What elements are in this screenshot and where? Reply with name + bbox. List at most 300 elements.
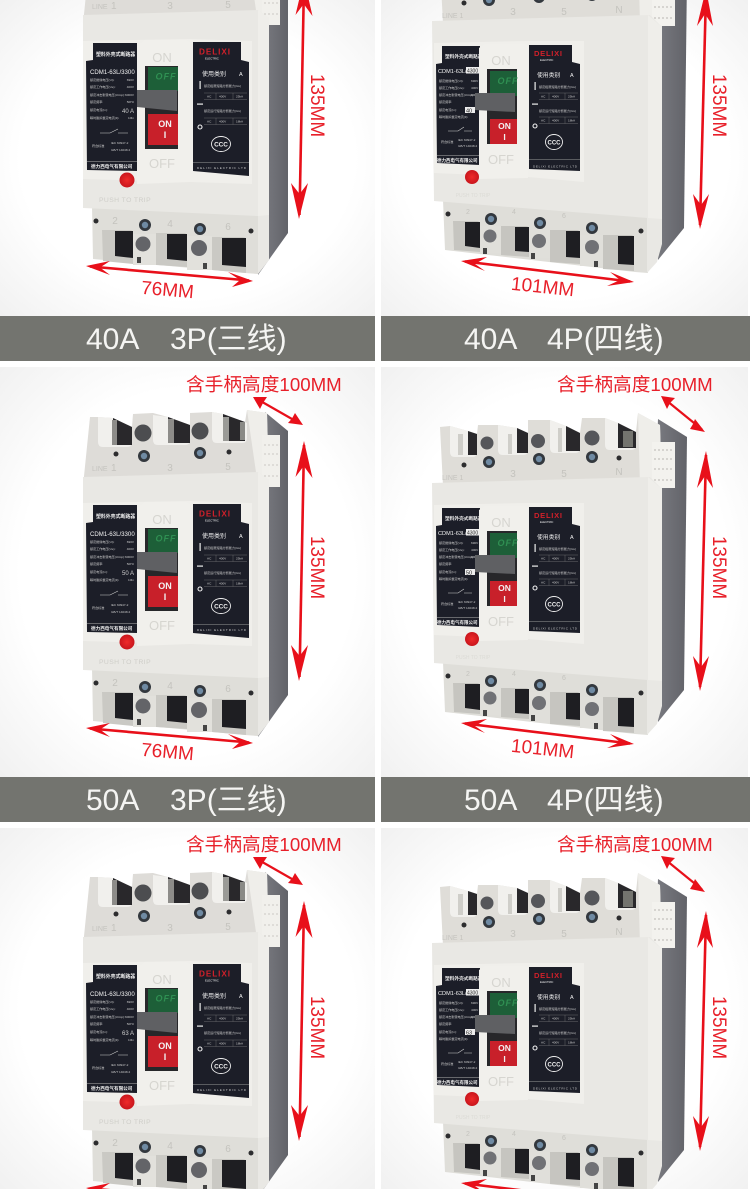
switch text: 2 — [466, 209, 470, 216]
label text: AC — [207, 582, 212, 586]
label text: 额定频率: — [90, 561, 103, 566]
label text: 瞬时脱扣整定电流(Ii): — [439, 114, 468, 119]
switch text: 5 — [225, 922, 231, 933]
switch text: 3 — [510, 929, 516, 940]
label text: 额定电流(In): — [439, 569, 457, 574]
label text: 25kA — [236, 556, 244, 560]
label text: 400V — [552, 556, 560, 560]
label text: IEC 60947-2 — [458, 1060, 476, 1064]
switch text: PUSH TO TRIP — [99, 197, 151, 204]
label text: 额定极限短路分断能力(Icu) — [204, 83, 241, 88]
switch text: ON — [158, 1041, 172, 1051]
switch text — [92, 922, 231, 1155]
switch text: LINE 1 — [442, 935, 464, 942]
switch text: OFF — [156, 72, 176, 82]
label text: 25kA — [568, 94, 576, 98]
label text: 50Hz — [127, 1022, 134, 1026]
switch — [465, 44, 528, 184]
label text: 6000V — [125, 1015, 135, 1019]
label text: 10In — [128, 116, 134, 120]
switch text: ON — [158, 119, 172, 129]
label text: AC — [541, 94, 546, 98]
label text: AC — [207, 1016, 212, 1020]
label text: 18kA — [236, 582, 244, 586]
height label: 135MM — [708, 74, 729, 137]
switch text: ON — [152, 512, 172, 527]
switch text: I — [503, 132, 506, 142]
handle height label: 含手柄高度100MM — [557, 374, 713, 395]
switch text: LINE — [92, 926, 108, 933]
switch text: ON — [158, 581, 172, 591]
switch text: 2 — [112, 216, 118, 227]
switch text: LINE 1 — [442, 475, 464, 482]
label text: GB/T 14048.2 — [458, 606, 477, 610]
label text — [437, 511, 580, 630]
label text: 使用类别 — [537, 993, 560, 1001]
label text: GB/T 14048.2 — [111, 148, 130, 152]
switch text — [92, 462, 231, 695]
switch text: 4 — [512, 671, 516, 678]
label text: CDM1-63L/ — [438, 69, 467, 75]
label text: GB/T 14048.2 — [111, 610, 130, 614]
label text: 额定绝缘电压(Ui): — [90, 539, 115, 544]
label text: DELIXI — [199, 970, 230, 978]
height label: 135MM — [708, 996, 729, 1059]
label text — [437, 971, 580, 1090]
label text: CDM1-63L/ — [438, 991, 467, 997]
label text: 额定工作电压(Ue): — [90, 84, 116, 89]
switch text: 6 — [225, 1144, 231, 1155]
breaker 3P — [83, 870, 288, 1189]
label text: 塑料外壳式断路器 — [96, 51, 135, 58]
label text: AC — [541, 556, 546, 560]
label text: 690V — [127, 1000, 135, 1004]
label text: ELECTRIC — [540, 520, 553, 524]
label text: 额定绝缘电压(Ui): — [90, 77, 115, 82]
switch text: OFF — [149, 618, 175, 633]
label text: 额定运行短路分断能力(Ics) — [539, 570, 576, 575]
caption bar: 50A — [464, 784, 517, 817]
switch text: 2 — [466, 671, 470, 678]
switch text: ON — [498, 121, 511, 131]
label text: IEC 60947-2 — [458, 600, 476, 604]
switch text: N — [615, 467, 623, 478]
label text: 额定极限短路分断能力(Icu) — [204, 1005, 241, 1010]
caption bar — [381, 777, 750, 822]
label text: 瞬时脱扣整定电流(Ii): — [90, 115, 119, 120]
label text: 400V — [127, 1007, 135, 1011]
label text: 400V — [552, 118, 560, 122]
label text: 63 A — [122, 1031, 134, 1037]
switch text: OFF — [149, 156, 175, 171]
label text: ELECTRIC — [205, 518, 219, 522]
dimension arrows — [461, 0, 713, 286]
switch text: ON — [498, 583, 511, 593]
switch — [465, 966, 528, 1106]
label text: AC — [541, 1040, 546, 1044]
label text: 400V — [471, 1008, 479, 1012]
label text: A — [570, 535, 574, 541]
caption bar — [0, 777, 375, 822]
label text: CCC — [214, 604, 228, 610]
handle height label: 含手柄高度100MM — [186, 374, 342, 395]
label text: 25kA — [236, 1016, 244, 1020]
switch text: 6 — [225, 684, 231, 695]
label text: 德力西电气有限公司 — [437, 1079, 478, 1086]
label text: 25kA — [568, 556, 576, 560]
label text: 50Hz — [127, 562, 134, 566]
dimension arrows — [461, 856, 713, 1189]
label text: A — [239, 534, 243, 540]
label text: 额定频率: — [90, 1021, 103, 1026]
label text: 德力西电气有限公司 — [437, 157, 478, 164]
label text: 400V — [219, 94, 227, 98]
label text: CCC — [214, 1064, 228, 1070]
label text: 额定电流(In): — [90, 107, 108, 112]
width label: 76MM — [140, 278, 195, 303]
label text: CCC — [548, 602, 561, 608]
label text: 额定绝缘电压(Ui): — [439, 78, 464, 83]
label text: 瞬时脱扣整定电流(Ii): — [90, 577, 119, 582]
switch text: OFF — [498, 998, 518, 1008]
label text: 额定冲击耐受电压(Uimp): — [439, 92, 474, 97]
height label: 135MM — [708, 536, 729, 599]
label text: 塑料外壳式断路器 — [96, 973, 135, 980]
label text: 4300 — [467, 530, 478, 536]
switch text: 3 — [167, 1, 173, 12]
switch text: 4 — [167, 219, 173, 230]
label text: 额定绝缘电压(Ui): — [439, 540, 464, 545]
label text: 符合标准 — [441, 139, 453, 144]
label text: DELIXI ELECTRIC LTD — [533, 1086, 578, 1090]
switch text — [92, 0, 231, 233]
label text: 额定工作电压(Ue): — [90, 1006, 116, 1011]
panel: 50A 4P — [381, 367, 750, 822]
label text: CDM1-63L/3300 — [90, 531, 135, 538]
label text: 690V — [471, 541, 479, 545]
caption bar: 3P(三线) — [170, 323, 287, 356]
label text: 400V — [219, 1042, 227, 1046]
label text: 40 — [466, 108, 472, 114]
switch text: 5 — [225, 462, 231, 473]
label text: 40 A — [122, 109, 134, 115]
switch — [465, 506, 528, 646]
label text: 使用类别 — [202, 992, 226, 1000]
switch text: OFF — [149, 1078, 175, 1093]
switch text: 5 — [561, 7, 567, 18]
panel: 50A 3P — [0, 367, 375, 822]
label text: 使用类别 — [537, 71, 560, 79]
switch text: 3 — [510, 7, 516, 18]
label text: 额定极限短路分断能力(Icu) — [539, 546, 576, 551]
label text: 额定频率: — [439, 99, 452, 104]
label text: 额定工作电压(Ue): — [439, 85, 465, 90]
label text: 6000V — [125, 93, 135, 97]
handle height label: 含手柄高度100MM — [186, 834, 342, 855]
switch text: 4 — [167, 681, 173, 692]
panel: 40A 4P — [381, 0, 750, 361]
label text: 50 A — [122, 571, 134, 577]
label text: 额定电流(In): — [439, 107, 457, 112]
switch text — [442, 5, 623, 220]
switch text: PUSH TO TRIP — [99, 1119, 151, 1126]
height label: 135MM — [306, 74, 327, 137]
label text: 额定电流(In): — [90, 1029, 108, 1034]
label text: 10In — [128, 578, 134, 582]
label text: 690V — [127, 78, 135, 82]
switch text: N — [615, 5, 623, 16]
label text: 额定冲击耐受电压(Uimp): — [439, 1014, 474, 1019]
panel: 40A 3P — [0, 0, 375, 361]
label text: ELECTRIC — [205, 978, 219, 982]
switch text: PUSH TO TRIP — [99, 659, 151, 666]
label text: 额定冲击耐受电压(Uimp): — [90, 92, 125, 97]
label text: 400V — [552, 1016, 560, 1020]
switch text — [442, 927, 623, 1142]
caption bar — [0, 316, 375, 361]
label text: 额定频率: — [439, 1021, 452, 1026]
label text: A — [239, 72, 243, 78]
label text: DELIXI — [534, 511, 562, 520]
switch text: PUSH TO TRIP — [456, 1115, 491, 1121]
label text: DELIXI — [534, 971, 562, 980]
width label: 101MM — [510, 274, 575, 301]
breaker 3P — [83, 410, 288, 737]
label text: IEC 60947-2 — [458, 138, 476, 142]
label text: 塑料外壳式断路器 — [445, 975, 483, 982]
label text: 瞬时脱扣整定电流(Ii): — [439, 1036, 468, 1041]
label text: ELECTRIC — [205, 56, 219, 60]
label text: 额定绝缘电压(Ui): — [90, 999, 115, 1004]
label text: 符合标准 — [441, 1061, 453, 1066]
switch text: 1 — [111, 1, 117, 12]
label text: 额定运行短路分断能力(Ics) — [539, 108, 576, 113]
label text: CCC — [548, 140, 561, 146]
label text: 额定频率: — [439, 561, 452, 566]
breaker 3P — [83, 0, 288, 275]
label text: CDM1-63L/ — [438, 531, 467, 537]
label text: 63 — [466, 1030, 472, 1036]
label text: GB/T 14048.2 — [458, 1066, 477, 1070]
switch text: 2 — [112, 678, 118, 689]
label text: 德力西电气有限公司 — [91, 163, 133, 170]
caption bar: 4P(四线) — [547, 323, 664, 356]
label text: IEC 60947-2 — [111, 603, 129, 607]
switch text: ON — [491, 53, 511, 68]
label text: 4300 — [467, 68, 478, 74]
label text: 400V — [471, 548, 479, 552]
switch text: 1 — [111, 463, 117, 474]
label text: 额定运行短路分断能力(Ics) — [204, 570, 241, 575]
label text — [87, 510, 249, 632]
caption bar: 3P(三线) — [170, 784, 287, 817]
switch text: PUSH TO TRIP — [456, 193, 491, 199]
panel: 63A 3P — [0, 828, 375, 1189]
caption bar: 50A — [86, 784, 139, 817]
label text: ELECTRIC — [540, 980, 553, 984]
label text: DELIXI — [199, 48, 230, 56]
label text: 符合标准 — [92, 1065, 104, 1070]
label text: DELIXI — [199, 510, 230, 518]
switch text: 6 — [562, 675, 566, 682]
switch text: 3 — [510, 469, 516, 480]
label text: IEC 60947-2 — [111, 1063, 129, 1067]
label text: 额定频率: — [90, 99, 103, 104]
handle height label: 含手柄高度100MM — [557, 834, 713, 855]
label text: 400V — [552, 580, 560, 584]
label text: 塑料外壳式断路器 — [445, 515, 483, 522]
label text: 额定运行短路分断能力(Ics) — [539, 1030, 576, 1035]
label text: A — [239, 994, 243, 1000]
label text: 塑料外壳式断路器 — [445, 53, 483, 60]
breaker 4P — [432, 873, 687, 1189]
dimension arrows — [461, 396, 713, 748]
label text: 400V — [219, 556, 227, 560]
caption bar: 40A — [464, 323, 517, 356]
switch text: LINE — [92, 4, 108, 11]
label text: 6000V — [471, 93, 481, 97]
label text: 额定电流(In): — [90, 569, 108, 574]
label text: 额定冲击耐受电压(Uimp): — [439, 554, 474, 559]
label text: AC — [207, 1042, 212, 1046]
switch text: I — [164, 592, 166, 602]
label text: 使用类别 — [537, 533, 560, 541]
label text: 690V — [471, 1001, 479, 1005]
caption bar: 40A — [86, 323, 139, 356]
caption bar: 4P(四线) — [547, 784, 664, 817]
label text: 额定运行短路分断能力(Ics) — [204, 108, 241, 113]
switch text: I — [164, 1052, 166, 1062]
breaker 4P — [432, 0, 687, 273]
label text: 额定运行短路分断能力(Ics) — [204, 1030, 241, 1035]
label text: GB/T 14048.2 — [458, 144, 477, 148]
switch text: 5 — [561, 929, 567, 940]
label text: 额定极限短路分断能力(Icu) — [539, 1006, 576, 1011]
label text: 690V — [471, 79, 479, 83]
label text: 使用类别 — [202, 70, 226, 78]
label text: 400V — [219, 582, 227, 586]
label text: AC — [541, 118, 546, 122]
switch text: ON — [491, 975, 511, 990]
panel: 63A 4P — [381, 828, 748, 1189]
switch text: ON — [152, 50, 172, 65]
label text: 德力西电气有限公司 — [91, 1085, 133, 1092]
label text: 德力西电气有限公司 — [437, 619, 478, 626]
switch text: 2 — [466, 1131, 470, 1138]
label text: 10In — [128, 1038, 134, 1042]
switch text: 4 — [512, 209, 516, 216]
switch text: OFF — [156, 994, 176, 1004]
label text: CDM1-63L/3300 — [90, 991, 135, 998]
height label: 135MM — [306, 996, 327, 1059]
label text: 额定工作电压(Ue): — [439, 1007, 465, 1012]
switch text: I — [164, 130, 166, 140]
width label: 76MM — [140, 740, 195, 765]
label text: 额定极限短路分断能力(Icu) — [539, 84, 576, 89]
caption bar — [381, 316, 750, 361]
label text: AC — [207, 120, 212, 124]
label text: 4300 — [467, 990, 478, 996]
height label: 135MM — [306, 536, 327, 599]
switch text: 5 — [561, 469, 567, 480]
label text: 瞬时脱扣整定电流(Ii): — [90, 1037, 119, 1042]
label text: 额定冲击耐受电压(Uimp): — [90, 1014, 125, 1019]
switch text: 6 — [562, 213, 566, 220]
label text: 18kA — [236, 120, 244, 124]
label text: 6000V — [471, 555, 481, 559]
label text: 400V — [552, 1040, 560, 1044]
breaker 4P — [432, 413, 687, 735]
label text: AC — [207, 556, 212, 560]
switch text: 6 — [225, 222, 231, 233]
label text: AC — [541, 1016, 546, 1020]
label text: DELIXI ELECTRIC LTD — [533, 164, 578, 168]
switch text: N — [615, 927, 623, 938]
label text: 400V — [219, 1016, 227, 1020]
label text: 6000V — [125, 555, 135, 559]
label text: 6000V — [471, 1015, 481, 1019]
switch text: OFF — [498, 538, 518, 548]
label text: 18kA — [568, 580, 576, 584]
switch text: PUSH TO TRIP — [456, 655, 491, 661]
label text: DELIXI ELECTRIC LTD — [197, 166, 247, 170]
switch text: ON — [498, 1043, 511, 1053]
label text: 400V — [471, 86, 479, 90]
label text: 额定工作电压(Ue): — [439, 547, 465, 552]
label text: CDM1-63L/3300 — [90, 69, 135, 76]
switch text: OFF — [488, 1074, 514, 1089]
label text: 符合标准 — [92, 143, 104, 148]
label text: A — [570, 73, 574, 79]
label text: 18kA — [236, 1042, 244, 1046]
label text: 400V — [127, 85, 135, 89]
switch text: 3 — [167, 923, 173, 934]
label text: 使用类别 — [202, 532, 226, 540]
label text: CCC — [214, 142, 228, 148]
label text — [437, 49, 580, 168]
label text: GB/T 14048.2 — [111, 1070, 130, 1074]
label text: DELIXI ELECTRIC LTD — [197, 628, 247, 632]
label text: AC — [541, 580, 546, 584]
switch text: ON — [491, 515, 511, 530]
label text: 额定冲击耐受电压(Uimp): — [90, 554, 125, 559]
label text: AC — [207, 94, 212, 98]
label text: 符合标准 — [441, 601, 453, 606]
switch text: OFF — [488, 152, 514, 167]
label text — [87, 48, 249, 170]
label text: 690V — [127, 540, 135, 544]
switch text: ON — [152, 972, 172, 987]
label text: 额定极限短路分断能力(Icu) — [204, 545, 241, 550]
label text: DELIXI — [534, 49, 562, 58]
label text: 18kA — [568, 118, 576, 122]
switch text: LINE 1 — [442, 13, 464, 20]
dimension arrows — [86, 397, 312, 749]
label text: IEC 60947-2 — [111, 141, 129, 145]
switch text — [442, 467, 623, 682]
label text: 400V — [552, 94, 560, 98]
switch text: 6 — [562, 1135, 566, 1142]
switch text: 2 — [112, 1138, 118, 1149]
dimension arrows — [86, 0, 312, 287]
switch text: 1 — [111, 923, 117, 934]
label text: 符合标准 — [92, 605, 104, 610]
switch text: 4 — [512, 1131, 516, 1138]
label text: CCC — [548, 1062, 561, 1068]
dimension arrows — [86, 857, 312, 1189]
switch text: I — [503, 1054, 506, 1064]
switch text: OFF — [156, 534, 176, 544]
